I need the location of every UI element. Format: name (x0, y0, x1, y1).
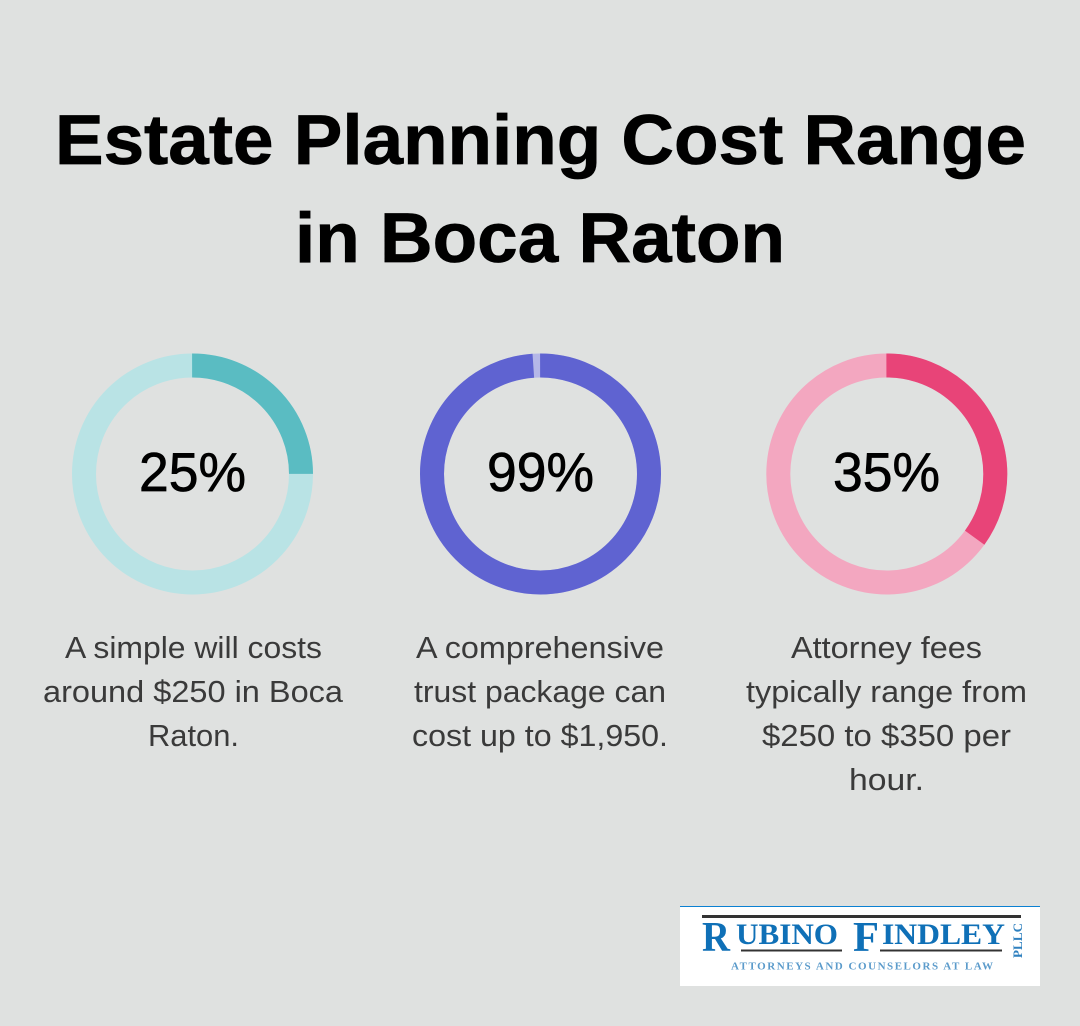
donut chart: 35% (778, 366, 995, 582)
logo: Rubino Findley PLLC: PLLC (1010, 923, 1025, 958)
donut chart: 99% (432, 366, 649, 582)
title: Estate Planning Cost Range (55, 100, 1026, 179)
description: attorney fees: typically range from (746, 675, 1027, 709)
value: 25%: 25% (139, 441, 246, 503)
panel: simple will (43, 366, 343, 753)
donut chart: 25% (84, 366, 301, 582)
title (55, 100, 1026, 277)
description: attorney fees: $250 to $350 per (762, 719, 1011, 753)
logo: Rubino Findley PLLC: F (853, 915, 879, 961)
title: in Boca Raton (295, 198, 785, 277)
logo: Rubino Findley PLLC: UBINO (736, 918, 838, 951)
panel: trust package (412, 366, 668, 753)
description: trust package: A comprehensive (416, 631, 664, 665)
description: trust package: cost up to $1,950. (412, 719, 668, 753)
description: trust package: trust package can (414, 675, 666, 709)
description: attorney fees (746, 631, 1027, 797)
panel: attorney fees (746, 366, 1027, 797)
description: simple will (43, 631, 343, 753)
logo: Rubino Findley PLLC: INDLEY (882, 918, 1005, 951)
logo: Rubino Findley PLLC: ATTORNEYS AND COUNSELORS AT LAW (731, 960, 993, 972)
logo: Rubino Findley PLLC: R (702, 915, 731, 961)
value: 35%: 35% (833, 441, 940, 503)
value: 99%: 99% (487, 441, 594, 503)
description: simple will: A simple will costs (65, 631, 322, 665)
description: attorney fees: Attorney fees (791, 631, 982, 665)
description: simple will: Raton. (148, 719, 239, 753)
description: attorney fees: hour. (849, 763, 924, 797)
logo: Rubino Findley PLLC (680, 906, 1040, 986)
description: simple will: around $250 in Boca (43, 675, 343, 709)
description: trust package (412, 631, 668, 753)
